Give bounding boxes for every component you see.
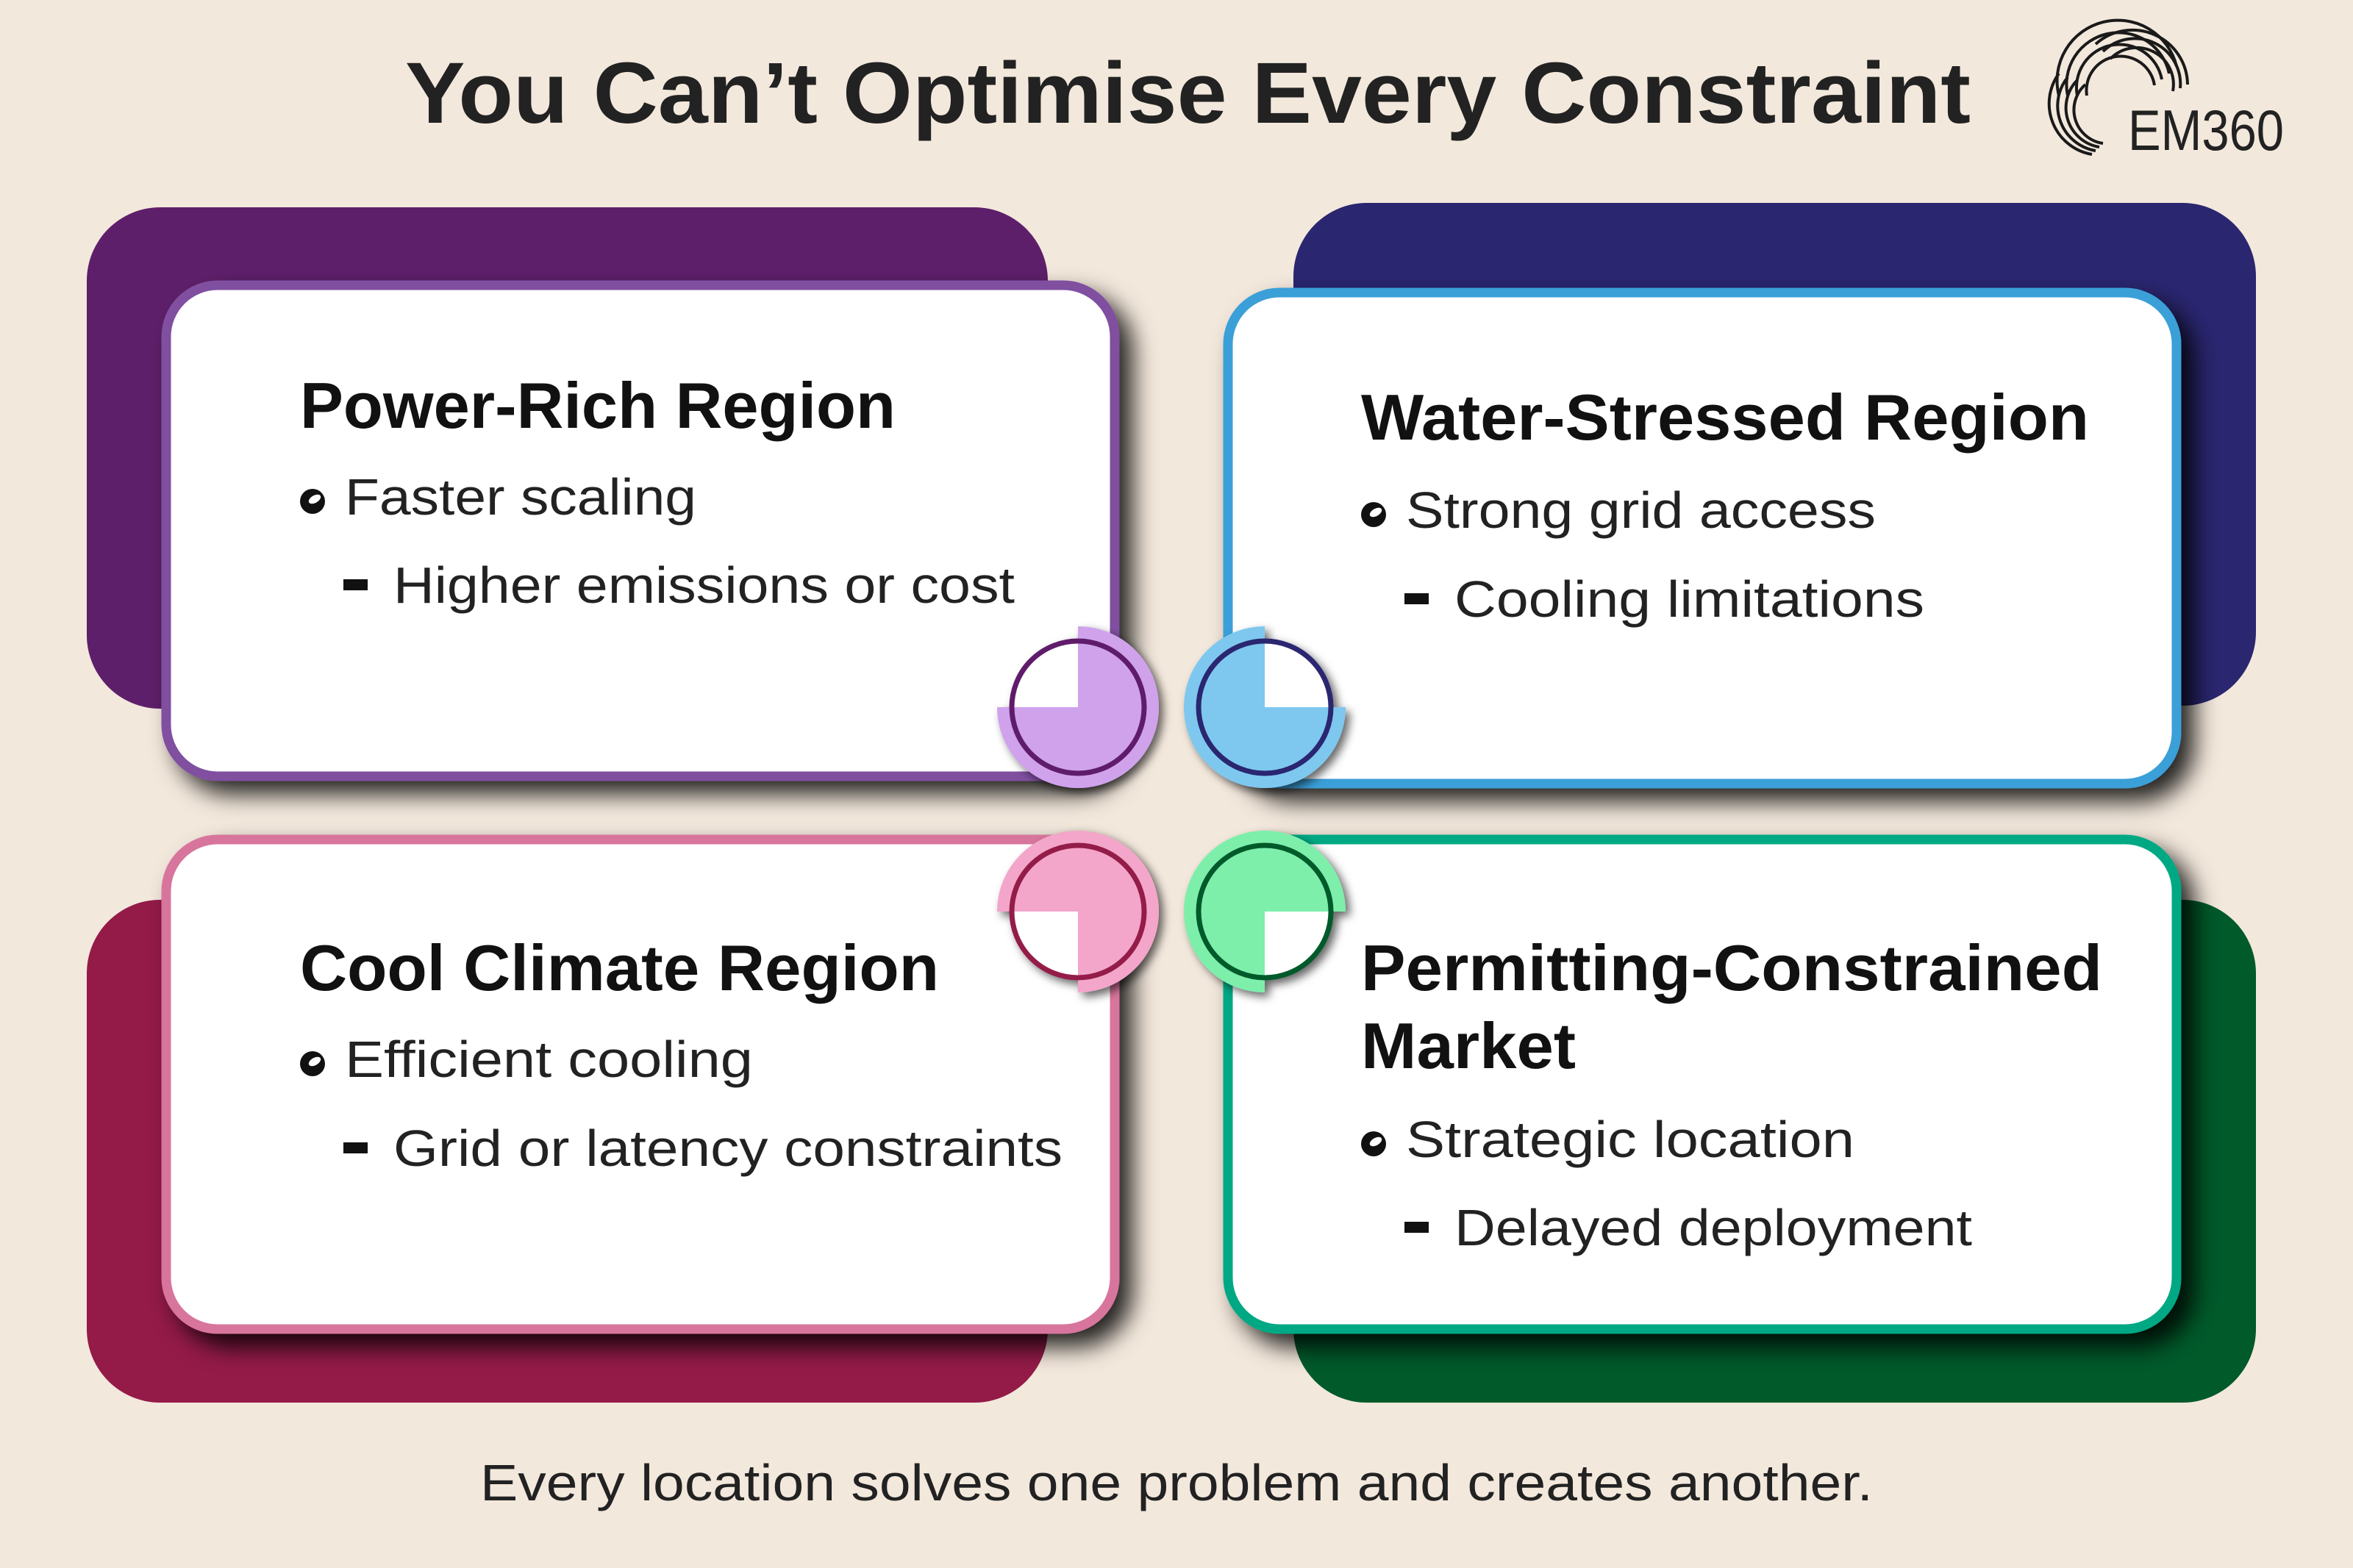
panel: cool climate region xyxy=(87,840,1115,1403)
panel: permitting-constrained market: Delayed deployment xyxy=(1454,1199,1972,1256)
icon: pink quarter circle xyxy=(997,831,1159,992)
icon: green quarter circle xyxy=(1184,831,1346,992)
panel: water-stressed region: Strong grid access xyxy=(1406,482,1876,539)
panel: cool climate region: Grid or latency constraints xyxy=(393,1120,1063,1177)
panel: water-stressed region: Cooling limitations xyxy=(1454,570,1924,628)
heading: Power-Rich Region xyxy=(300,369,896,442)
heading: Permitting-Constrained xyxy=(1361,931,2102,1004)
panel: water-stressed region xyxy=(1228,203,2256,784)
panel: cool climate region: Efficient cooling xyxy=(345,1031,753,1088)
heading: Water-Stressed Region xyxy=(1361,381,2089,454)
icon: purple quarter circle xyxy=(997,626,1159,788)
panel: permitting-constrained market: Market xyxy=(1361,1009,1576,1082)
panel: permitting-constrained market xyxy=(1228,840,2256,1403)
logo xyxy=(2049,21,2284,162)
logo: EM360 xyxy=(2128,98,2284,162)
footer caption: Every location solves one problem and creates another. xyxy=(480,1454,1873,1511)
panel: permitting-constrained market: Strategic location xyxy=(1406,1111,1854,1168)
bullet xyxy=(300,489,325,514)
panel: power-rich region: Higher emissions or cost xyxy=(393,556,1015,614)
panel: power-rich region xyxy=(87,207,1115,776)
heading: Cool Climate Region xyxy=(300,931,939,1004)
panel: power-rich region: Faster scaling xyxy=(345,468,696,526)
title: You Can’t Optimise Every Constraint xyxy=(405,45,1971,142)
icon: blue quarter circle xyxy=(1184,626,1346,788)
